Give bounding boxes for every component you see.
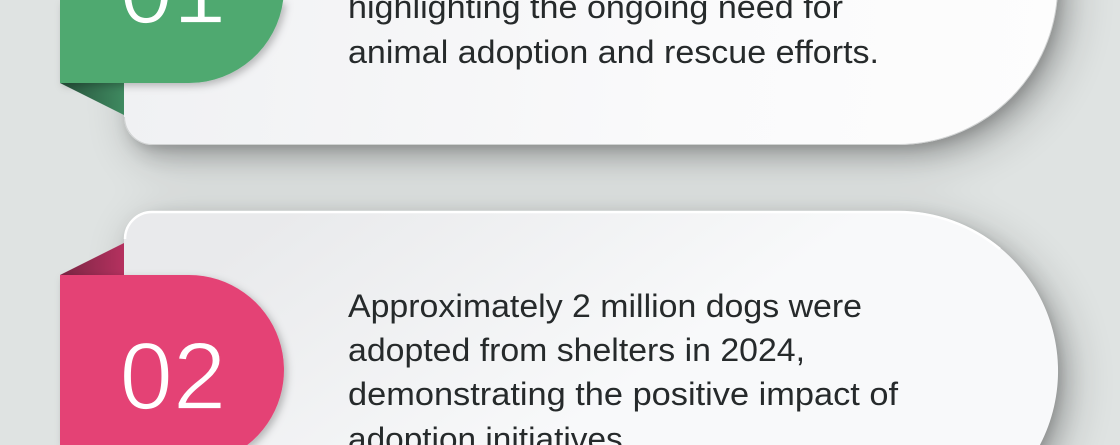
text block 01: animal adoption and rescue efforts. — [348, 34, 879, 70]
text block 02: adopted from shelters in 2024, — [348, 332, 805, 368]
panel: card 01 — [60, 0, 1057, 145]
text block 01 — [348, 0, 879, 70]
text block 02: demonstrating the positive impact of — [348, 376, 898, 412]
number tab 01 — [60, 0, 283, 83]
text block 02 — [348, 288, 898, 445]
number tab 02 — [60, 275, 284, 445]
panel: card 02 — [60, 211, 1058, 445]
card 02 background — [124, 211, 1058, 445]
card 01 background — [124, 0, 1057, 145]
number 02: 02 — [120, 323, 226, 430]
text block 02: Approximately 2 million dogs were — [348, 288, 862, 324]
ribbon fold 02 — [60, 243, 124, 275]
ribbon fold 01 — [60, 83, 124, 115]
